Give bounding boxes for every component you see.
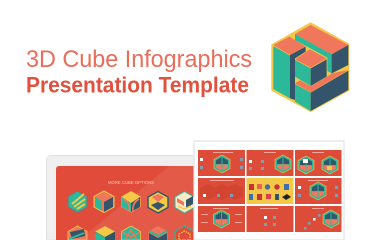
cube option: ribbons — [68, 226, 87, 240]
title — [26, 46, 252, 98]
cube option: solid — [95, 226, 115, 240]
laptop screen — [56, 166, 206, 240]
cube option: hollow cube — [148, 192, 168, 213]
screen heading: MORE CUBE OPTIONS — [108, 180, 154, 185]
heading line 2: Presentation Template — [26, 72, 249, 98]
cube option icons, row 1 — [68, 191, 194, 213]
slide 5: yellow icons — [246, 178, 294, 204]
slide 9 — [295, 206, 342, 232]
cube option icons, row 2 — [68, 226, 194, 240]
slide 7 — [198, 206, 245, 232]
cube option: stairs — [68, 191, 87, 212]
slide 3 — [295, 150, 342, 176]
heading line 1: 3D Cube Infographics — [26, 46, 252, 73]
slides sheet — [194, 141, 344, 240]
sheet card — [194, 141, 344, 240]
cube option: pixel — [175, 226, 194, 240]
laptop mockup — [46, 156, 216, 240]
slide 4 — [198, 178, 245, 204]
laptop frame — [46, 156, 216, 240]
slide 2 — [246, 150, 294, 176]
cube option: maze — [175, 192, 194, 213]
cube option: wireframe — [122, 226, 140, 240]
icon: 3D cube logo — [272, 23, 348, 111]
cube option: blocks — [94, 191, 114, 212]
slide 6 — [295, 178, 342, 204]
slide 1 — [198, 150, 245, 176]
slide 8 — [246, 206, 294, 232]
cube option: curves — [122, 191, 140, 212]
cube option: layers — [148, 226, 168, 240]
